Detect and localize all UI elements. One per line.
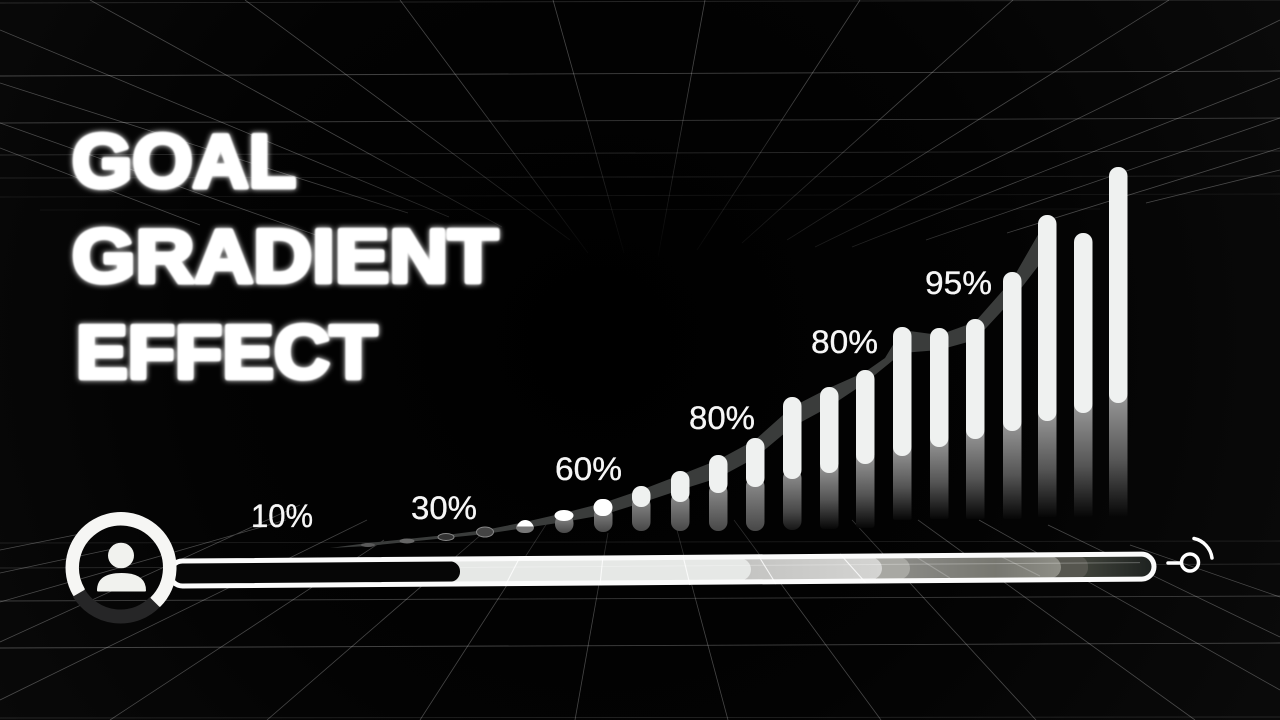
track interior: [170, 554, 1154, 587]
capsule outline: [170, 554, 1154, 586]
title: Goal Gradient Effect: [72, 119, 498, 394]
bar reflections: [516, 393, 1128, 533]
percentage labels: 30%: [411, 490, 477, 526]
progress bar track with fill segments: [170, 554, 1154, 587]
avatar ring: [67, 513, 176, 617]
bar chart: rising bars with reflections: [516, 167, 1128, 533]
title: Goal Gradient Effect: GRADIENT: [72, 214, 498, 298]
title: Goal Gradient Effect: GOAL: [72, 119, 296, 203]
highlights over bar: [460, 563, 1140, 567]
percentage labels: 95%: [925, 265, 992, 301]
title: Goal Gradient Effect: EFFECT: [76, 310, 377, 394]
percentage labels: 80%: [811, 324, 878, 360]
percentage labels: [251, 265, 992, 534]
percentage labels: 80%: [689, 400, 755, 436]
icon: person: [97, 543, 146, 592]
percentage labels: 60%: [555, 451, 622, 487]
bars: [517, 167, 1128, 526]
icon: goal target: [1168, 538, 1212, 571]
ring unfilled dark arc: [78, 592, 156, 617]
fill segments: [452, 556, 1154, 583]
bar grid highlights: [505, 554, 1040, 586]
ring progress arc: [67, 513, 176, 606]
percentage labels: 10%: [251, 498, 313, 534]
gradient ribbon curve behind bars: [330, 233, 1039, 548]
